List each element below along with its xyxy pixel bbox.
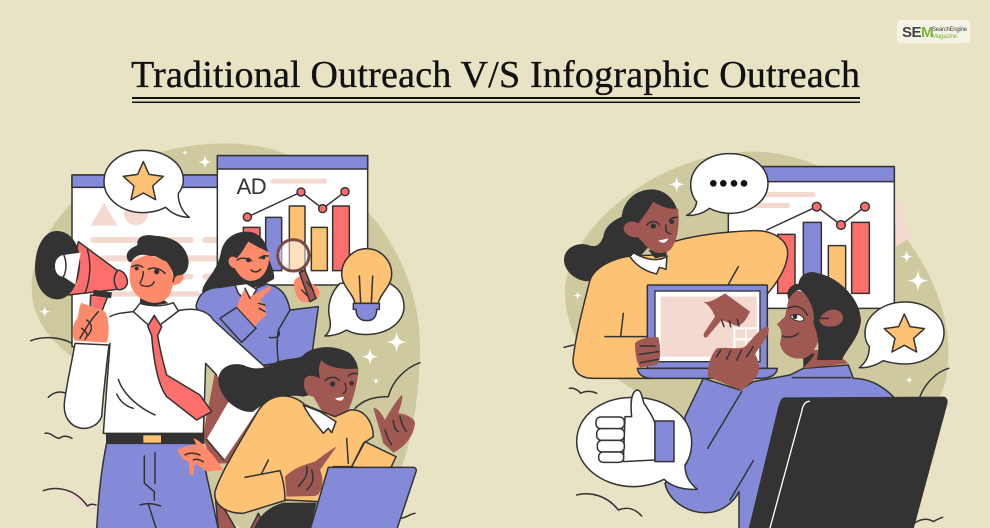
clouds <box>564 202 949 523</box>
backdrop blob <box>565 152 948 463</box>
woman in yellow <box>177 347 416 528</box>
face <box>624 202 679 253</box>
speech bubble: star <box>859 302 944 368</box>
man with chair <box>665 272 948 528</box>
speech bubble: dots <box>687 154 768 215</box>
shirt <box>103 309 268 460</box>
neck <box>140 297 168 305</box>
woman's hands <box>635 293 750 367</box>
neck <box>803 350 848 368</box>
hair <box>127 235 189 277</box>
panel: traditional outreach illustration <box>31 143 420 528</box>
face <box>130 255 184 303</box>
sparkles <box>39 150 408 385</box>
speech bubble: thumbs up <box>577 390 697 489</box>
free hand on waist <box>177 438 223 475</box>
title underline <box>132 97 860 103</box>
face <box>304 360 358 418</box>
sparkles <box>573 176 929 384</box>
speech bubble: star <box>104 150 189 217</box>
hair <box>564 189 678 281</box>
torso <box>196 284 318 370</box>
backdrop blob <box>32 143 420 528</box>
raised hand <box>373 395 415 453</box>
laptop <box>310 467 416 528</box>
collar <box>630 253 667 274</box>
clouds <box>31 338 420 518</box>
bar chart <box>243 188 349 271</box>
hand <box>73 303 109 343</box>
belt <box>106 434 204 444</box>
pointing hand <box>708 327 769 391</box>
megaphone mouth <box>35 231 80 299</box>
face <box>229 242 269 281</box>
AD label: AD <box>237 174 267 199</box>
sweater <box>215 396 373 513</box>
chair <box>748 397 948 528</box>
pointing hand <box>285 447 337 497</box>
laptop <box>637 285 777 378</box>
woman in yellow <box>564 189 788 378</box>
legs <box>203 360 277 463</box>
man with megaphone <box>35 231 268 528</box>
logo: Magazine <box>932 34 958 40</box>
megaphone handle <box>90 295 108 312</box>
speech bubble: lightbulb <box>325 249 404 336</box>
hair <box>202 232 274 292</box>
logo <box>897 20 970 43</box>
neck <box>648 250 667 258</box>
ear <box>819 310 843 327</box>
logo: SEM <box>902 24 933 41</box>
hand and magnifier <box>294 276 319 302</box>
jacket <box>665 365 893 528</box>
megaphone cone <box>68 242 127 295</box>
tie <box>148 316 212 420</box>
collar <box>235 283 257 303</box>
sleeve <box>64 343 109 428</box>
collar <box>303 405 336 433</box>
trousers <box>97 443 218 528</box>
woman in purple <box>196 232 319 528</box>
hair <box>787 272 861 360</box>
bar chart <box>767 202 869 293</box>
arm and pointing hand <box>220 307 256 342</box>
hair <box>218 347 358 412</box>
face <box>777 290 827 359</box>
ad window with chart <box>217 156 368 285</box>
panel: infographic outreach illustration <box>564 152 949 528</box>
thumbs up icon <box>596 390 674 462</box>
logo: SearchEngine <box>932 27 968 33</box>
title: Traditional Outreach V/S Infographic Outreach <box>131 54 860 96</box>
collar <box>133 303 178 325</box>
sweater <box>573 231 788 378</box>
ad window back <box>72 175 221 347</box>
chart window <box>728 167 894 308</box>
